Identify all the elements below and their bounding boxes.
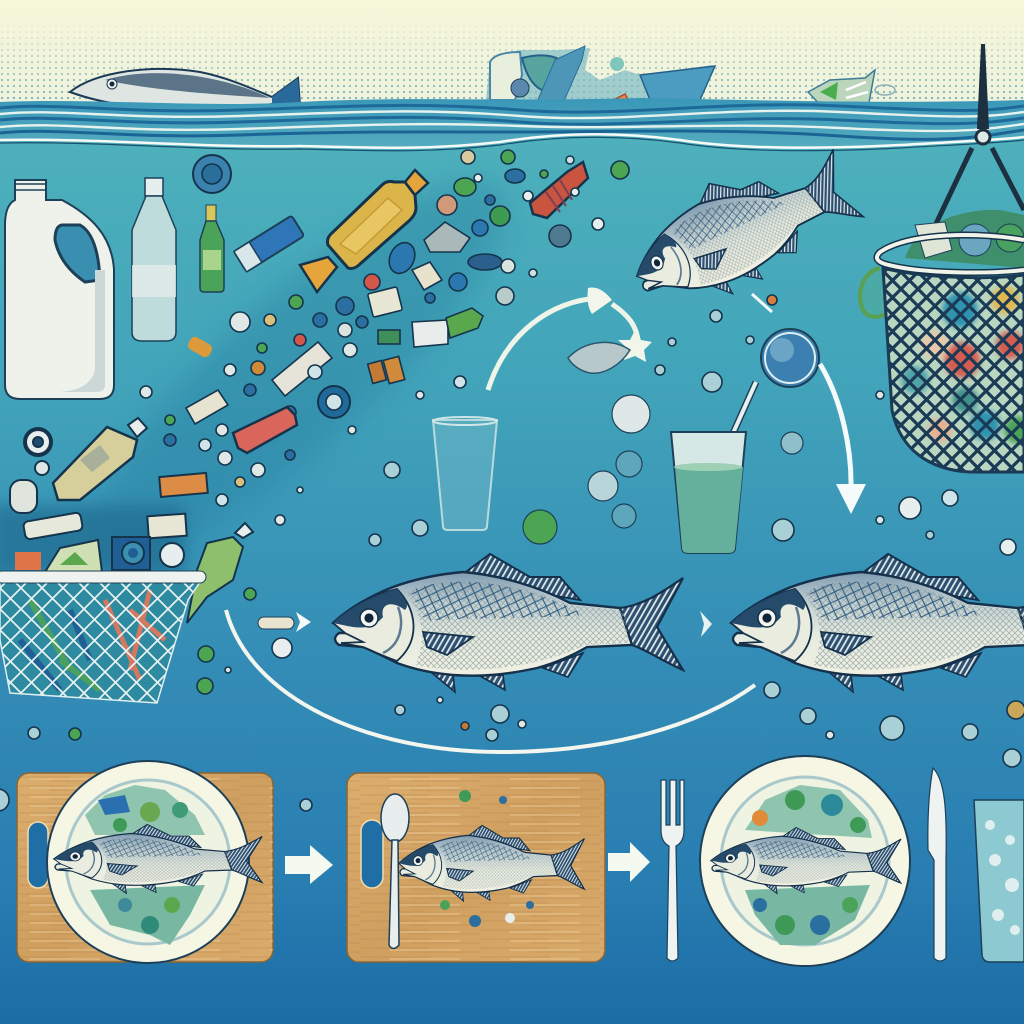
fish on board	[399, 825, 584, 901]
plastic jug	[5, 180, 114, 399]
curved arrow with star	[488, 288, 652, 390]
floating debris at the surface, centre	[486, 46, 715, 122]
spoon	[381, 794, 409, 948]
fish on plate	[54, 824, 262, 894]
waves at the water surface	[0, 98, 1024, 151]
curved arrow down to the lower fish	[752, 294, 866, 514]
left basket net	[0, 571, 206, 703]
cutting board with plate and fish	[17, 761, 273, 963]
floating plastic bubbles	[523, 395, 803, 544]
clear plastic bottle	[132, 178, 176, 341]
fish swimming upper right	[614, 132, 870, 327]
stream of plastic fragments	[0, 150, 1024, 811]
small green bottle	[200, 205, 224, 292]
red plastic tube	[530, 162, 588, 218]
glass of contaminated water with straw	[671, 382, 756, 553]
small white arrow between fish	[700, 611, 712, 637]
sky above the water	[0, 0, 1024, 110]
glass with microplastics	[974, 800, 1024, 962]
floating debris at the surface, right	[808, 70, 895, 110]
microplastic bubble	[761, 329, 819, 387]
fish on final plate	[711, 828, 901, 894]
second large fish, contaminated	[731, 554, 1024, 692]
knife	[928, 768, 946, 961]
large fish, contaminated	[333, 554, 683, 692]
fallen plastic pile above the left basket	[0, 407, 297, 623]
net full of plastic with hook	[860, 45, 1024, 472]
darker haze behind the plastic stream	[49, 134, 551, 606]
small fish eating plastic	[568, 342, 630, 373]
plastic bits on board	[440, 790, 534, 927]
white arrow to second board	[285, 845, 333, 884]
small white arrow with capsule	[258, 612, 311, 632]
yellow plastic bottle	[300, 170, 428, 292]
empty clear cup	[433, 417, 497, 530]
long curved arrow under the fish	[226, 610, 755, 752]
white arrow to final plate	[608, 842, 650, 882]
plate with plastic salad	[47, 761, 249, 963]
second cutting board with spoon and fish	[347, 773, 605, 962]
fork	[661, 780, 684, 961]
final plate with fish and plastic	[700, 756, 910, 966]
fish swimming at the surface	[70, 69, 300, 110]
blue plastic tube	[234, 216, 304, 272]
